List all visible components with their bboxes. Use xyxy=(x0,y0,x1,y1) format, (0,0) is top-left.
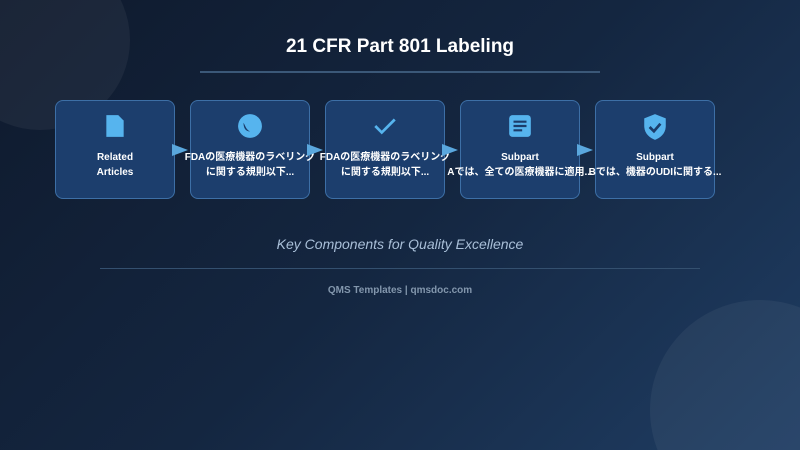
text: Subpart xyxy=(501,152,539,163)
text xyxy=(447,152,593,178)
text: Subpart xyxy=(636,152,674,163)
text xyxy=(589,152,721,178)
icon: list xyxy=(509,115,531,137)
text: FDAの医療機器のラベリング xyxy=(320,152,450,163)
footer: QMS Templates | qmsdoc.com xyxy=(328,285,472,296)
arrow xyxy=(172,144,188,156)
arrow xyxy=(577,144,593,156)
text xyxy=(96,152,133,178)
text: に関する規則以下... xyxy=(206,167,294,178)
subtitle: Key Components for Quality Excellence xyxy=(277,236,523,252)
text xyxy=(185,151,315,178)
icon: shield xyxy=(644,114,666,140)
text: Related xyxy=(97,152,133,163)
text: Bでは、機器のUDIに関する... xyxy=(589,167,721,178)
text: に関する規則以下... xyxy=(341,167,429,178)
icon: globe xyxy=(238,114,262,138)
panel: Subpart A xyxy=(460,100,580,199)
panel: FDA 2 xyxy=(325,100,445,199)
panel: FDA 1 xyxy=(190,100,310,199)
panel: Subpart B xyxy=(595,100,715,199)
icon: check xyxy=(374,118,396,134)
arrow xyxy=(307,144,323,156)
text: Aでは、全ての医療機器に適用... xyxy=(447,167,593,178)
title: 21 CFR Part 801 Labeling xyxy=(286,36,514,57)
text: FDAの医療機器のラベリング xyxy=(185,152,315,163)
panel: related articles xyxy=(55,100,175,199)
icon: document xyxy=(106,115,124,137)
arrow xyxy=(442,144,458,156)
text xyxy=(320,151,450,178)
text: Articles xyxy=(97,167,133,178)
